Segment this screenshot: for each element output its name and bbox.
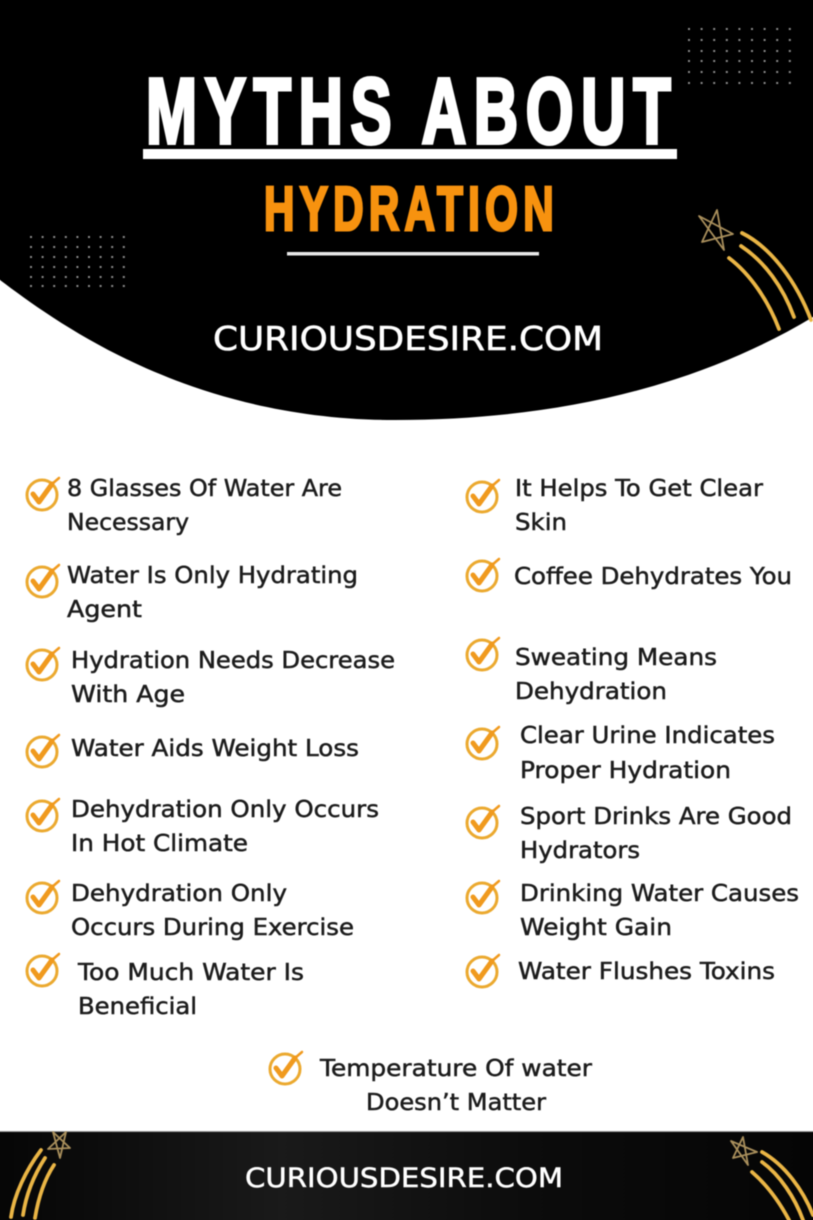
item: sweating: Dehydration <box>515 677 667 705</box>
item: clear skin: Skin <box>515 508 567 536</box>
item: during exercise: Dehydration Only <box>71 879 287 907</box>
title underline <box>143 149 677 159</box>
item: clear urine: Clear Urine Indicates <box>520 721 775 749</box>
title: myths about: MYTHS ABOUT <box>146 59 671 163</box>
item: during exercise <box>27 879 354 941</box>
list: left column <box>27 474 395 1020</box>
icon: footer left shooting star <box>11 1132 70 1218</box>
item: weight loss: Water Aids Weight Loss <box>71 734 359 762</box>
item: too much water <box>27 954 304 1020</box>
icon: footer right shooting star <box>731 1137 813 1220</box>
item: during exercise: Occurs During Exercise <box>71 913 354 941</box>
item: weight gain: Drinking Water Causes <box>520 879 799 907</box>
item: too much water: Beneficial <box>78 992 197 1020</box>
website label: CURIOUSDESIRE.COM <box>213 319 603 358</box>
item: hydration needs: With Age <box>71 680 185 708</box>
item: flushes toxins: Water Flushes Toxins <box>518 957 775 985</box>
panel: footer bar <box>0 1131 813 1220</box>
item: flushes toxins <box>467 955 775 987</box>
item: clear skin <box>467 474 763 536</box>
item: only hydrating agent: Water Is Only Hydrating <box>67 561 358 589</box>
item: weight gain: Weight Gain <box>520 913 672 941</box>
item: temperature of water: Temperature Of water <box>319 1054 592 1082</box>
footer website label: CURIOUSDESIRE.COM <box>245 1163 563 1194</box>
item: only hydrating agent: Agent <box>67 595 142 623</box>
item: hydration needs: Hydration Needs Decrease <box>71 646 395 674</box>
item: sport drinks <box>467 802 792 864</box>
item: only hydrating agent <box>27 561 358 623</box>
item: sport drinks: Sport Drinks Are Good <box>520 802 792 830</box>
item: clear urine <box>467 721 775 784</box>
subtitle underline <box>287 252 539 256</box>
item: hot climate <box>27 795 379 857</box>
panel: black header <box>0 0 813 420</box>
item: hot climate: In Hot Climate <box>71 829 248 857</box>
item: too much water: Too Much Water Is <box>77 958 304 986</box>
list: right column <box>467 474 799 987</box>
item: weight gain <box>467 879 799 941</box>
item: coffee: Coffee Dehydrates You <box>514 562 792 590</box>
item: hot climate: Dehydration Only Occurs <box>71 795 379 823</box>
item: sweating: Sweating Means <box>515 643 717 671</box>
item: 8 glasses: 8 Glasses Of Water Are <box>67 474 342 502</box>
dot grid: left <box>30 237 126 286</box>
item: 8 glasses: Necessary <box>67 508 189 536</box>
item: 8 glasses <box>27 474 342 536</box>
item: sport drinks: Hydrators <box>520 836 640 864</box>
item: clear urine: Proper Hydration <box>520 756 731 784</box>
item: sweating <box>467 638 717 705</box>
item: temperature of water <box>270 1052 592 1116</box>
dot grid: top right <box>688 29 792 83</box>
icon: shooting star <box>699 210 811 329</box>
item: clear skin: It Helps To Get Clear <box>515 474 763 502</box>
item: temperature of water: Doesn’t Matter <box>366 1088 546 1116</box>
item: hydration needs <box>27 646 395 708</box>
subtitle: hydration: HYDRATION <box>264 175 554 244</box>
